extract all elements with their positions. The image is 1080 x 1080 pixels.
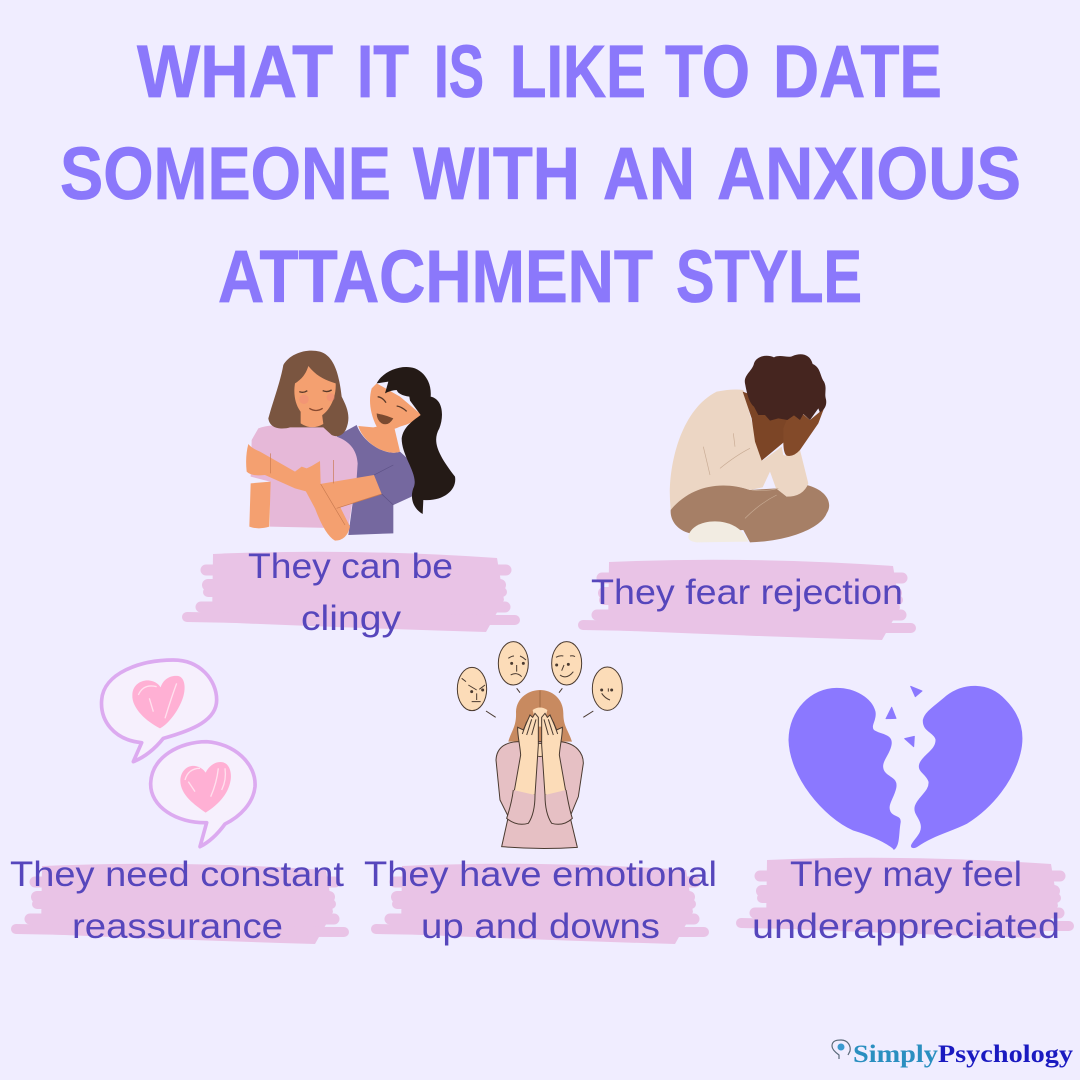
brush highlight	[583, 560, 911, 640]
title: IS	[434, 30, 484, 113]
label: They need constant	[10, 855, 344, 894]
title: LIKE	[510, 30, 646, 113]
title: WHAT	[137, 30, 333, 113]
label: clingy	[301, 599, 402, 638]
title: SOMEONE	[60, 132, 391, 215]
brush highlight	[16, 864, 344, 944]
label	[752, 855, 1060, 946]
icon: person sitting with head in hands	[670, 354, 829, 542]
label	[248, 547, 453, 638]
icon: speech bubbles with hearts	[102, 660, 255, 847]
label: They may feel	[790, 855, 1022, 894]
icon: woman covering face with four mood faces	[457, 642, 622, 849]
icon: two women hugging	[246, 351, 455, 541]
logo: Simply Psychology	[832, 1040, 1074, 1068]
panel: they need constant reassurance	[10, 660, 344, 946]
title: ANXIOUS	[717, 132, 1021, 215]
title: IT	[357, 30, 409, 113]
icon: broken heart	[789, 686, 1022, 849]
panel: they fear rejection	[583, 354, 911, 640]
brush highlight	[376, 864, 704, 944]
wordmark: Simply Psychology	[853, 1041, 1074, 1068]
brush highlight	[741, 858, 1069, 938]
title: WITH	[413, 132, 580, 215]
label	[364, 855, 717, 946]
label: up and downs	[421, 907, 660, 946]
label: underappreciated	[752, 907, 1060, 946]
panel: they may feel underappreciated	[741, 686, 1069, 946]
label: They fear rejection	[591, 573, 903, 612]
panel: they can be clingy	[187, 351, 515, 638]
icon: head with lightbulb	[832, 1040, 850, 1059]
label: They have emotional	[364, 855, 717, 894]
title: ATTACHMENT	[218, 235, 653, 318]
label: reassurance	[72, 907, 283, 946]
brush highlight	[187, 552, 515, 632]
title: DATE	[773, 30, 942, 113]
panel: they have emotional up and downs	[364, 642, 717, 946]
title	[60, 30, 1021, 318]
title: AN	[603, 132, 695, 215]
title: TO	[665, 30, 750, 113]
label	[10, 855, 344, 946]
label: They can be	[248, 547, 453, 586]
title: STYLE	[676, 235, 862, 318]
